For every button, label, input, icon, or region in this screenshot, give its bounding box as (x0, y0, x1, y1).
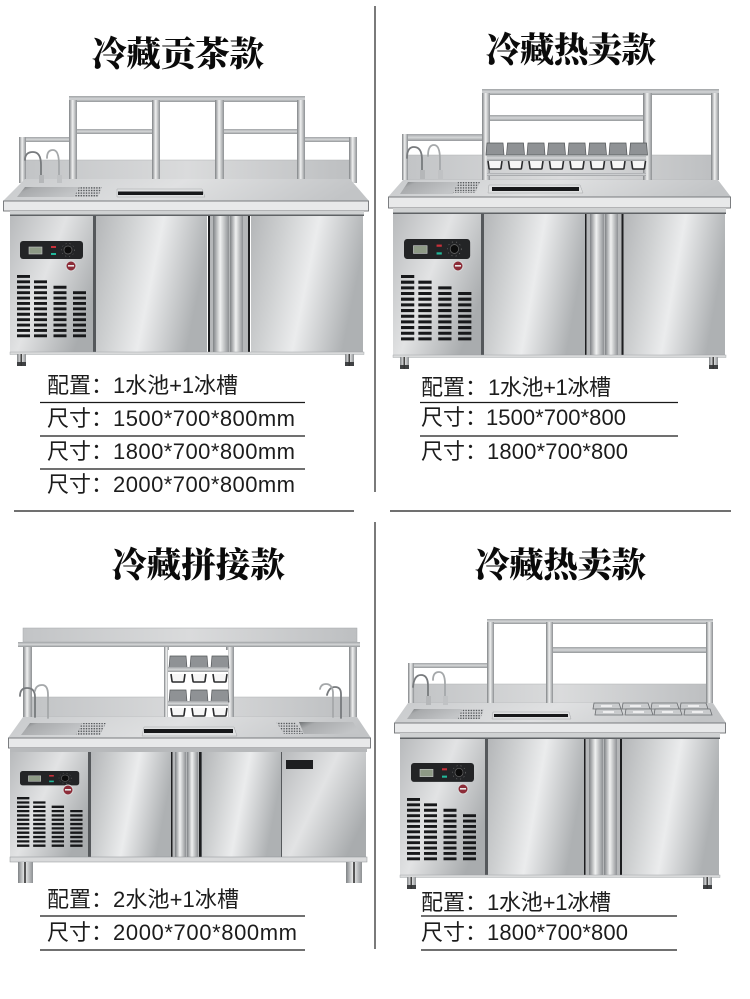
control panel (20, 771, 79, 785)
specs: bottom right (421, 890, 677, 950)
overhead shelf frame (19, 96, 357, 183)
specs: top right: 配置： (421, 375, 487, 400)
specs: bottom left: 2水池+1冰槽 (113, 887, 239, 912)
door handle (286, 760, 313, 769)
ice slot (117, 189, 205, 197)
sink and grille (400, 182, 480, 194)
food pans: two rows of four (593, 703, 712, 715)
feet (400, 357, 718, 369)
specs: bottom right: 1水池+1冰槽 (487, 890, 611, 915)
pans: row of eight (486, 143, 648, 176)
cabinet (400, 739, 720, 878)
specs: bottom left: 尺寸： (47, 920, 113, 945)
cabinet (10, 752, 367, 862)
divider: right horizontal (390, 510, 731, 512)
specs: top right: 1500*700*800 (486, 405, 626, 430)
specs: bottom right: 配置： (421, 890, 487, 915)
specs: top right (420, 375, 678, 464)
divider: bottom vertical (374, 522, 376, 949)
title: bottom left: 冷藏拼接款 (112, 546, 286, 585)
pans: two rows of three (168, 650, 229, 718)
ice slot (492, 712, 571, 719)
faucets (20, 684, 341, 718)
control panel (411, 763, 474, 782)
cabinet (10, 216, 364, 354)
sink and grille (407, 709, 484, 719)
power button (458, 784, 468, 794)
specs: top left: 1水池+1冰槽 (113, 373, 238, 398)
specs: bottom left: 2000*700*800mm (113, 920, 297, 945)
divider: top vertical (374, 6, 376, 492)
overhead shelf frame (402, 89, 719, 180)
overhead shelf (18, 628, 360, 720)
power button (453, 261, 463, 271)
title: top right: 冷藏热卖款 (486, 31, 656, 70)
sink and grille (17, 187, 102, 197)
product: bottom right workbench (394, 619, 726, 889)
product: top left workbench (3, 96, 369, 366)
vents (23, 797, 76, 847)
specs: top left: 配置： (47, 373, 113, 398)
product: bottom left workbench (8, 628, 371, 883)
sinks and grilles (21, 722, 361, 735)
vents (414, 798, 470, 860)
specs: bottom right: 1800*700*800 (487, 920, 628, 945)
divider: left horizontal (14, 510, 354, 512)
specs: top left: 尺寸： (47, 439, 113, 464)
control panel (404, 239, 470, 259)
product: top right workbench (388, 89, 731, 369)
feet (18, 862, 362, 883)
cabinet (393, 214, 726, 358)
control panel (20, 241, 83, 259)
vents (408, 275, 465, 340)
faucets (25, 150, 62, 183)
specs: bottom right: 尺寸： (421, 920, 487, 945)
specs: top right: 1水池+1冰槽 (488, 375, 611, 400)
feet (17, 354, 354, 366)
ice slot (488, 185, 583, 193)
specs: top left (40, 373, 305, 497)
specs: bottom left: 配置： (47, 887, 113, 912)
title: bottom right: 冷藏热卖款 (475, 546, 646, 585)
ice slot (142, 727, 237, 736)
specs: top right: 尺寸： (421, 439, 487, 464)
faucets (407, 145, 443, 179)
power button (63, 785, 73, 795)
specs: top left: 尺寸： (47, 406, 113, 431)
specs: top left: 1500*700*800mm (113, 406, 295, 431)
faucets (413, 672, 448, 705)
specs: top left: 1800*700*800mm (113, 439, 295, 464)
specs: top right: 1800*700*800 (487, 439, 628, 464)
title: top left: 冷藏贡茶款 (92, 35, 264, 74)
vents (24, 275, 80, 337)
overhead shelf frame (408, 619, 713, 703)
specs: top left: 2000*700*800mm (113, 472, 295, 497)
power button (66, 261, 76, 271)
specs: top left: 尺寸： (47, 472, 113, 497)
specs: bottom left (40, 887, 305, 950)
specs: top right: 尺寸： (421, 405, 487, 430)
feet (407, 877, 712, 889)
